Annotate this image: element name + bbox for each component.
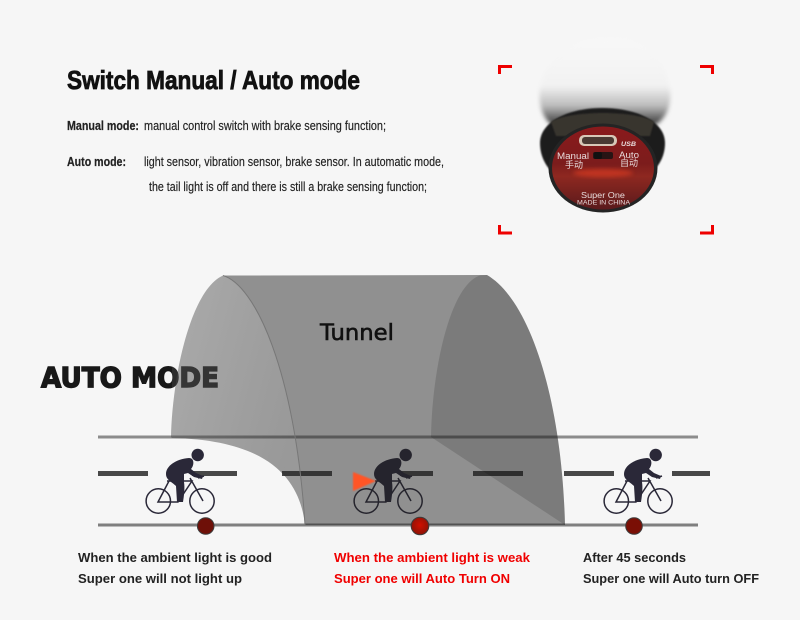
switch labels: Manual: [557, 151, 589, 161]
slide switch: [593, 152, 613, 159]
bicycle rider: before tunnel: [146, 449, 214, 513]
switch labels: Auto: [619, 150, 639, 160]
text block: auto mode: light sensor, vibration sensor, brake sensor. In automatic mode,: [144, 155, 444, 169]
text block: manual mode: Manual mode:: [67, 119, 139, 133]
switch labels: 手动: [565, 159, 583, 170]
caption: weak ambient light: When the ambient light is weak: [334, 550, 531, 565]
product photo: tail light: [540, 38, 670, 212]
title: Switch Manual / Auto mode: [67, 65, 360, 95]
text block: auto mode: [67, 155, 444, 194]
indicator: light on: [411, 517, 429, 535]
caption: good ambient light: Super one will not light up: [78, 571, 242, 586]
text block: auto mode: Auto mode:: [67, 155, 126, 169]
switch labels: 自动: [620, 157, 638, 168]
indicator: light off again: [626, 518, 642, 534]
caption: good ambient light: When the ambient light is good: [78, 550, 272, 565]
indicator: light off: [197, 518, 214, 534]
caption: weak ambient light: Super one will Auto Turn ON: [334, 571, 510, 586]
USB logo: USB: [621, 142, 637, 148]
tail light black housing: [540, 108, 665, 212]
heading: auto mode: AUTO MODE: [41, 361, 219, 394]
text block: manual mode: manual control switch with brake sensing function;: [144, 119, 386, 133]
caption: weak ambient light: [334, 550, 531, 586]
tunnel left face shading: [171, 276, 305, 525]
caption: after 45 seconds: [583, 550, 759, 586]
tunnel left entrance face: [171, 276, 305, 525]
switch labels: Super One: [581, 190, 625, 200]
road: centre dashes: [98, 471, 710, 476]
bicycle rider: after tunnel: [604, 449, 672, 513]
switch labels: [557, 150, 639, 206]
tunnel dark far wall: [431, 275, 565, 525]
tunnel label: Tunnel: [319, 321, 394, 346]
icon: red corner brackets: [500, 66, 712, 233]
text block: auto mode: the tail light is off and there is still a brake sensing function;: [149, 180, 427, 194]
tunnel main body: [223, 275, 565, 525]
road: bottom edge line: [98, 524, 698, 526]
bicycle rider: in tunnel: [354, 449, 422, 513]
switch labels: MADE IN CHINA: [577, 200, 630, 206]
caption: after 45 seconds: Super one will Auto turn OFF: [583, 571, 759, 586]
caption: after 45 seconds: After 45 seconds: [583, 550, 686, 565]
text block: manual mode: [67, 119, 386, 133]
tunnel: [171, 275, 565, 525]
tail light beam: [353, 472, 376, 491]
tail light translucent cap: [540, 38, 670, 125]
micro USB port: [579, 135, 617, 146]
road: top edge line: [98, 436, 698, 438]
caption: good ambient light: [78, 550, 272, 586]
tail light red disc: [552, 126, 654, 210]
red glow: [573, 169, 633, 177]
tunnel entrance edge: [223, 276, 305, 525]
